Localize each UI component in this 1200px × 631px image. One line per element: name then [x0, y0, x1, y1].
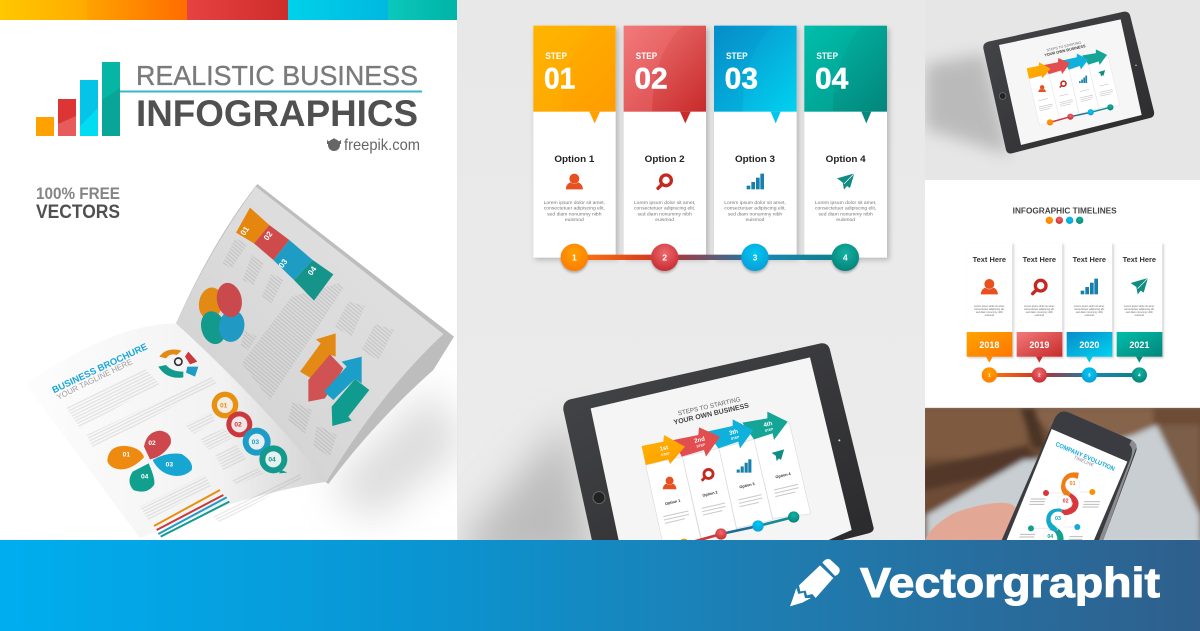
phone body: [1001, 411, 1137, 542]
option labels: [665, 472, 792, 506]
card shadows: [535, 28, 889, 260]
timeline nodes: [982, 367, 1147, 383]
option labels: Option 1: [665, 498, 682, 506]
timeline card 2018: 2018: [979, 340, 999, 350]
step card 2: [624, 26, 706, 258]
card shadows: [968, 244, 1164, 358]
banner background: [0, 540, 1200, 631]
panel background: [0, 0, 457, 540]
heading: YOUR OWN BUSINESS: [1044, 44, 1086, 58]
timeline card 2018: Lorem ipsum dolor sit amet,: [974, 305, 1005, 308]
numbered pins: 01: [220, 402, 228, 409]
hand: [926, 503, 1017, 542]
step arrows: 1st: [659, 445, 669, 453]
petal chart: 01: [123, 452, 130, 459]
timeline nodes: 3: [753, 253, 758, 263]
timeline card 2021: 2021: [1129, 340, 1149, 350]
timeline: [680, 511, 800, 540]
timeline card 2021: consectetuer adipiscing elit,: [1124, 308, 1155, 311]
tablet body: [983, 12, 1154, 154]
timeline nodes: [561, 244, 859, 273]
timeline: [1047, 104, 1113, 125]
step card 3: 03: [725, 62, 758, 95]
petal chart: 02: [148, 440, 156, 447]
timeline connector: [574, 255, 845, 260]
numbered pins: 04: [268, 457, 276, 464]
step card 1: STEP: [545, 51, 567, 61]
step card 1: 01: [544, 62, 575, 95]
brand name: Vectorgraphit: [860, 559, 1160, 606]
timeline card 2019: sed diam nonummy nibh: [1026, 311, 1053, 314]
timeline nodes: 4: [1138, 373, 1141, 378]
camera: [838, 439, 840, 441]
timeline nodes: 02: [1063, 498, 1069, 504]
brochure tagline: YOUR TAGLINE HERE: [55, 357, 134, 402]
step card 3: Lorem ipsum dolor sit amet,: [724, 200, 786, 206]
step card 1: euismod: [565, 217, 584, 223]
timeline card 2021: Text Here: [1123, 257, 1156, 264]
timeline card 2018: consectetuer adipiscing elit,: [974, 308, 1005, 311]
step card 1: Lorem ipsum dolor sit amet,: [544, 200, 605, 206]
timeline connector: [989, 373, 1139, 377]
option labels: Option 2: [702, 490, 718, 498]
freepik credit: freepik.com: [344, 137, 420, 154]
3d arrows: [300, 333, 369, 426]
home button: [593, 492, 605, 504]
timeline card 2020: euismod: [1085, 314, 1095, 317]
timeline nodes: 2: [1038, 373, 1041, 378]
tablet shadow: [458, 419, 592, 540]
title line 2: INFOGRAPHICS: [136, 93, 418, 134]
timeline card 2021: sed diam nonummy nibh: [1126, 311, 1153, 314]
timeline card 2021: [1117, 243, 1162, 363]
panel: left cover: [0, 0, 467, 540]
option cards: [1029, 55, 1120, 125]
step card 4: STEP: [816, 51, 838, 61]
step arrows: STEP: [764, 427, 775, 433]
tablet screen: [591, 357, 852, 547]
step card 4: Lorem ipsum dolor sit amet,: [815, 200, 876, 206]
timeline card 2018: [967, 243, 1012, 363]
step arrows: [642, 412, 788, 465]
colour stripe: [0, 0, 457, 20]
step arrows: 4th: [763, 421, 773, 429]
free vectors label: [36, 185, 120, 223]
panel: small tablet: [925, 12, 1154, 158]
center panel background: [458, 0, 925, 540]
step arrows: STEP: [730, 435, 741, 441]
home button: [999, 93, 1006, 99]
timeline card 2019: consectetuer adipiscing elit,: [1024, 308, 1055, 311]
step card 1: [533, 26, 616, 258]
step card 3: STEP: [726, 51, 748, 61]
icon: pencil: [790, 559, 840, 606]
timeline nodes: 2: [662, 253, 667, 263]
block 01: 03: [277, 257, 290, 270]
step card 4: Option 4: [826, 154, 866, 164]
block 01: [236, 208, 333, 301]
petal chart: [107, 431, 192, 492]
panel: large tablet: [458, 343, 874, 540]
tablet body: [563, 343, 874, 547]
step card 4: [804, 26, 887, 258]
phone side edge: [1098, 440, 1137, 542]
step arrows: 2nd: [694, 436, 706, 445]
timeline card 2018: Text Here: [973, 257, 1006, 264]
title rule: [120, 90, 422, 92]
step card 4: euismod: [836, 217, 855, 223]
step card 2: 02: [634, 62, 668, 95]
title line 1: REALISTIC BUSINESS: [136, 60, 418, 91]
timeline card 2020: Lorem ipsum dolor sit amet,: [1074, 305, 1105, 308]
numbered pins: [212, 392, 287, 473]
text blocks right page: [223, 238, 394, 457]
tablet shadow: [925, 53, 1010, 155]
blurred desk background: [920, 405, 1200, 542]
panel: timelines: [925, 180, 1200, 407]
phone subheading: TIMELINE: [1073, 455, 1095, 468]
timeline nodes: 03: [1055, 516, 1061, 522]
option icons: [663, 449, 784, 489]
step card 2: consectetuer adipiscing elit,: [634, 206, 695, 212]
numbered pins: 02: [234, 422, 242, 429]
left page: [25, 323, 327, 538]
step card 2: STEP: [636, 51, 657, 61]
step card 2: Lorem ipsum dolor sit amet,: [634, 200, 695, 206]
heading: YOUR OWN BUSINESS: [673, 402, 750, 427]
step card 3: consectetuer adipiscing elit,: [724, 206, 786, 212]
timeline nodes: 4: [843, 253, 848, 263]
logo bars: [36, 62, 120, 136]
option text lines: [1039, 84, 1113, 111]
step card 2: sed diam nonummy nibh: [638, 211, 692, 217]
heading: STEPS TO STARTING: [677, 396, 741, 417]
title dots: [1046, 217, 1083, 224]
timeline nodes: 04: [1047, 534, 1053, 540]
timeline card 2020: sed diam nonummy nibh: [1076, 311, 1103, 314]
free vectors label: VECTORS: [36, 201, 120, 223]
camera: [1135, 65, 1137, 66]
step arrows: 3th: [729, 429, 739, 437]
step card 1: sed diam nonummy nibh: [547, 211, 602, 217]
free vectors label: 100% FREE: [36, 185, 120, 203]
option labels: Option 4: [775, 472, 792, 479]
timeline card 2020: [1067, 243, 1112, 363]
phone heading: COMPANY EVOLUTION: [1054, 441, 1116, 473]
petal chart: 03: [166, 462, 173, 469]
step arrows: [1027, 49, 1107, 79]
step card 3: euismod: [746, 217, 765, 223]
timeline card 2019: [1017, 243, 1062, 363]
timeline card 2019: Text Here: [1023, 257, 1056, 264]
donut chart: [158, 350, 198, 378]
side markers: [1028, 489, 1095, 531]
venn circles: [198, 282, 244, 344]
panel: step cards: [458, 0, 925, 540]
numbered pins: 03: [252, 439, 259, 446]
option text lines: [663, 484, 799, 523]
timeline card 2020: consectetuer adipiscing elit,: [1074, 308, 1105, 311]
petal chart: 04: [141, 473, 149, 480]
timeline card 2021: euismod: [1135, 314, 1145, 317]
step card 3: [714, 26, 797, 258]
step card 2: Option 2: [645, 154, 685, 164]
timeline card 2020: 2020: [1079, 340, 1099, 350]
phone screen: [1006, 429, 1127, 542]
step card 3: Option 3: [735, 154, 775, 164]
brochure shadow: [328, 387, 467, 520]
tablet screen: [999, 19, 1142, 145]
brochure mockup: [25, 184, 467, 538]
timeline card 2019: euismod: [1035, 314, 1045, 317]
progress lines: [154, 490, 229, 537]
timeline nodes: 01: [1070, 481, 1076, 487]
timeline card 2019: 2019: [1029, 340, 1049, 350]
timeline card 2021: Lorem ipsum dolor sit amet,: [1124, 305, 1155, 308]
block 01: 01: [239, 224, 251, 237]
option cards: [646, 423, 811, 553]
timeline card 2020: Text Here: [1073, 257, 1106, 264]
step card 3: sed diam nonummy nibh: [728, 211, 782, 217]
block 01: 02: [262, 229, 275, 242]
text blocks left page: [66, 369, 302, 523]
step card 1: Option 1: [554, 154, 594, 164]
step arrows: STEP: [661, 451, 671, 457]
timelines title: INFOGRAPHIC TIMELINES: [1013, 206, 1117, 215]
panel background: [925, 0, 1200, 178]
timeline nodes: 3: [1088, 373, 1091, 378]
timeline card 2018: sed diam nonummy nibh: [976, 311, 1003, 314]
timeline card 2019: Lorem ipsum dolor sit amet,: [1024, 305, 1055, 308]
step card 4: sed diam nonummy nibh: [819, 211, 873, 217]
panel background: [925, 180, 1200, 407]
panel: brand banner: [0, 540, 1200, 631]
side text lines: [1019, 499, 1100, 539]
heading: STEPS TO STARTING: [1046, 41, 1082, 53]
right page: [176, 184, 454, 484]
step card 1: consectetuer adipiscing elit,: [544, 206, 605, 212]
step card 4: 04: [815, 62, 849, 95]
step arrows: STEP: [696, 443, 706, 449]
panel: phone photo: [920, 405, 1200, 545]
timeline nodes: 1: [988, 373, 991, 378]
timeline nodes: 1: [572, 253, 577, 263]
step card 2: euismod: [655, 217, 674, 223]
serpentine timeline: [1049, 475, 1078, 545]
block 01: 04: [306, 264, 319, 277]
step card 4: consectetuer adipiscing elit,: [815, 206, 876, 212]
brochure heading: BUSINESS BROCHURE: [51, 341, 149, 395]
timeline card 2018: euismod: [985, 314, 995, 317]
option labels: Option 3: [739, 482, 755, 489]
timeline nodes: [1043, 478, 1080, 544]
option icons: [1038, 70, 1105, 92]
